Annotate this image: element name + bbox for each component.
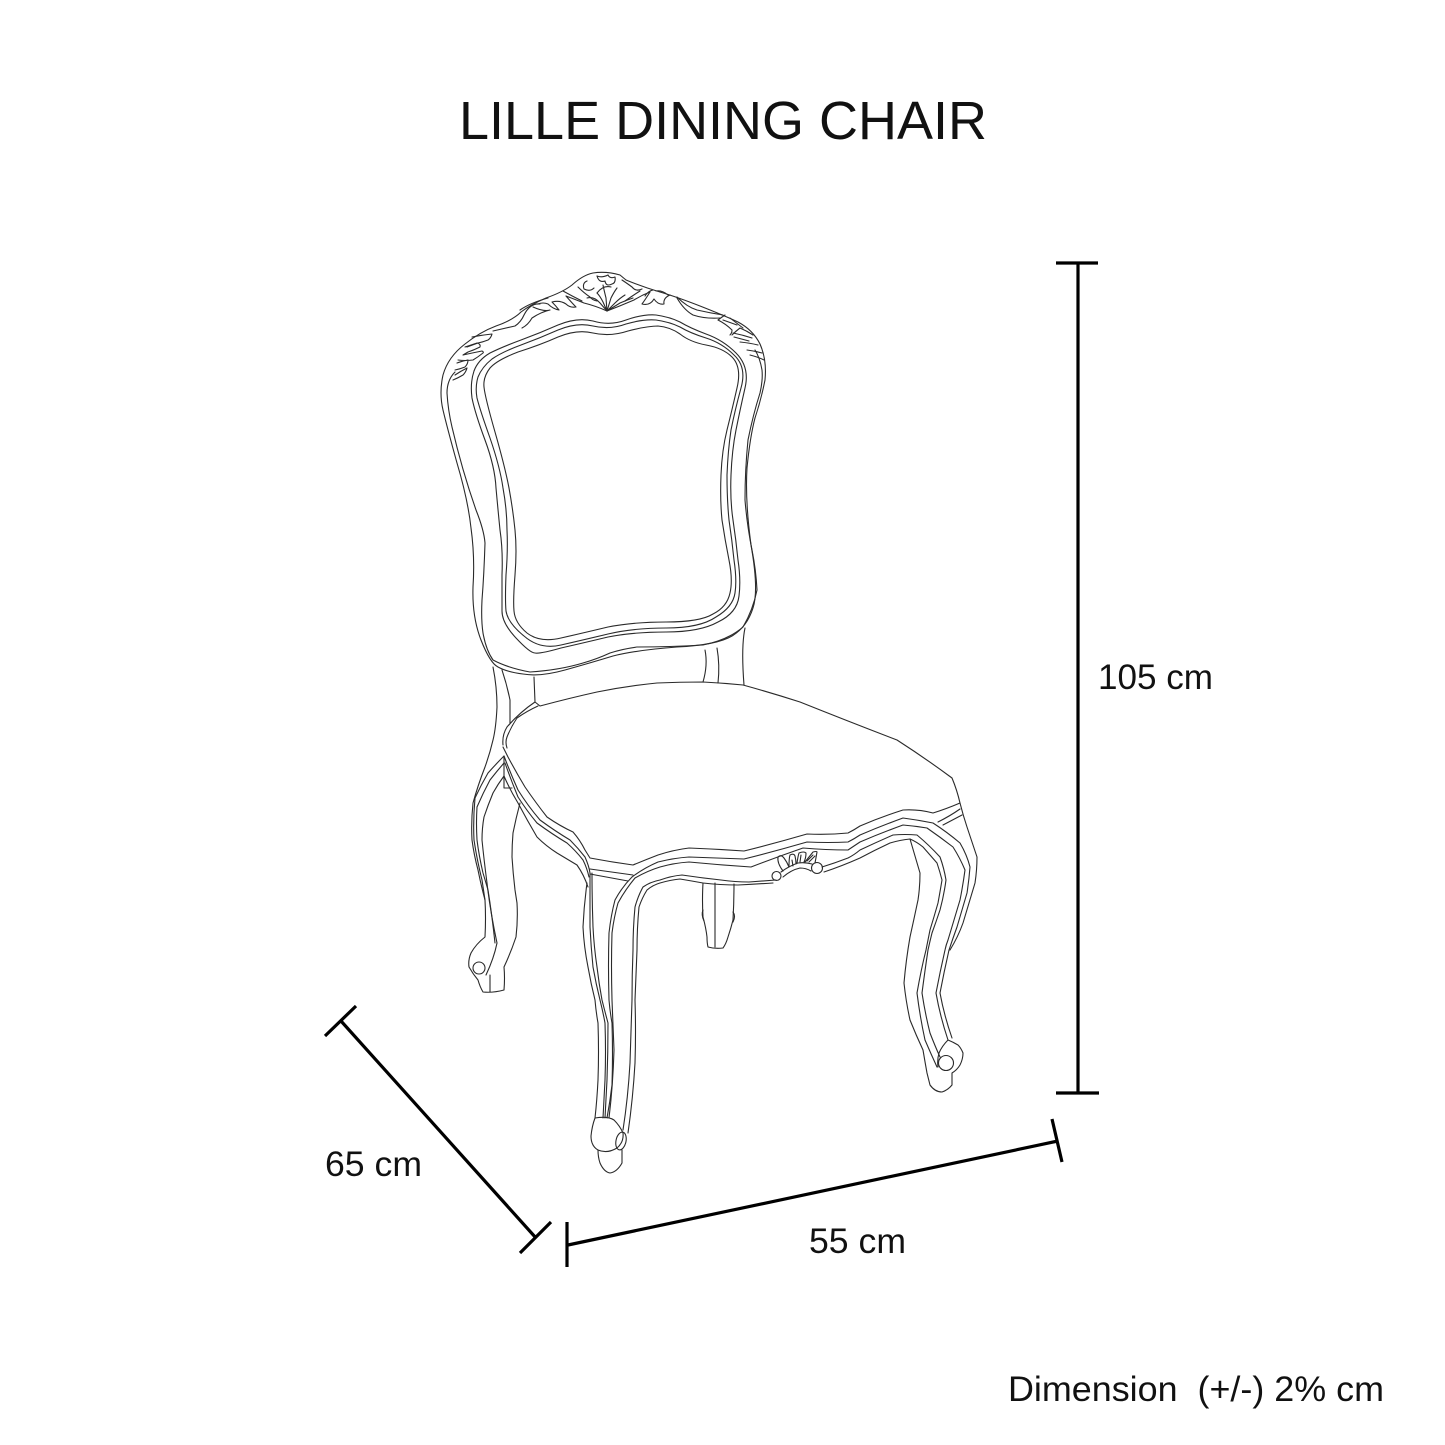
right shoulder carving <box>718 315 764 360</box>
crest carving <box>493 275 723 331</box>
dimension: width 55 cm <box>567 1119 1062 1267</box>
dimension: height 105 cm <box>1056 263 1099 1093</box>
label: 105 cm: 105 cm <box>1098 658 1213 697</box>
left shoulder carving <box>453 334 492 380</box>
seat <box>503 682 962 887</box>
seat rail carving <box>772 852 822 880</box>
chair line drawing <box>441 272 977 1173</box>
rear left leg <box>469 740 520 992</box>
label: 65 cm: 65 cm <box>325 1145 422 1184</box>
right front leg outer edge and foot <box>904 803 977 1092</box>
chair back frame <box>441 272 765 675</box>
tolerance note: Dimension (+/-) 2% cm <box>1008 1370 1384 1409</box>
dimension: depth 65 cm <box>325 1006 551 1253</box>
rear posts and back stiles <box>493 628 745 740</box>
title: LILLE DINING CHAIR <box>459 91 987 151</box>
seat rail apron and right front leg <box>608 818 970 1067</box>
left front leg <box>583 873 636 1173</box>
rear right leg <box>702 883 734 948</box>
label: 55 cm: 55 cm <box>809 1222 906 1261</box>
